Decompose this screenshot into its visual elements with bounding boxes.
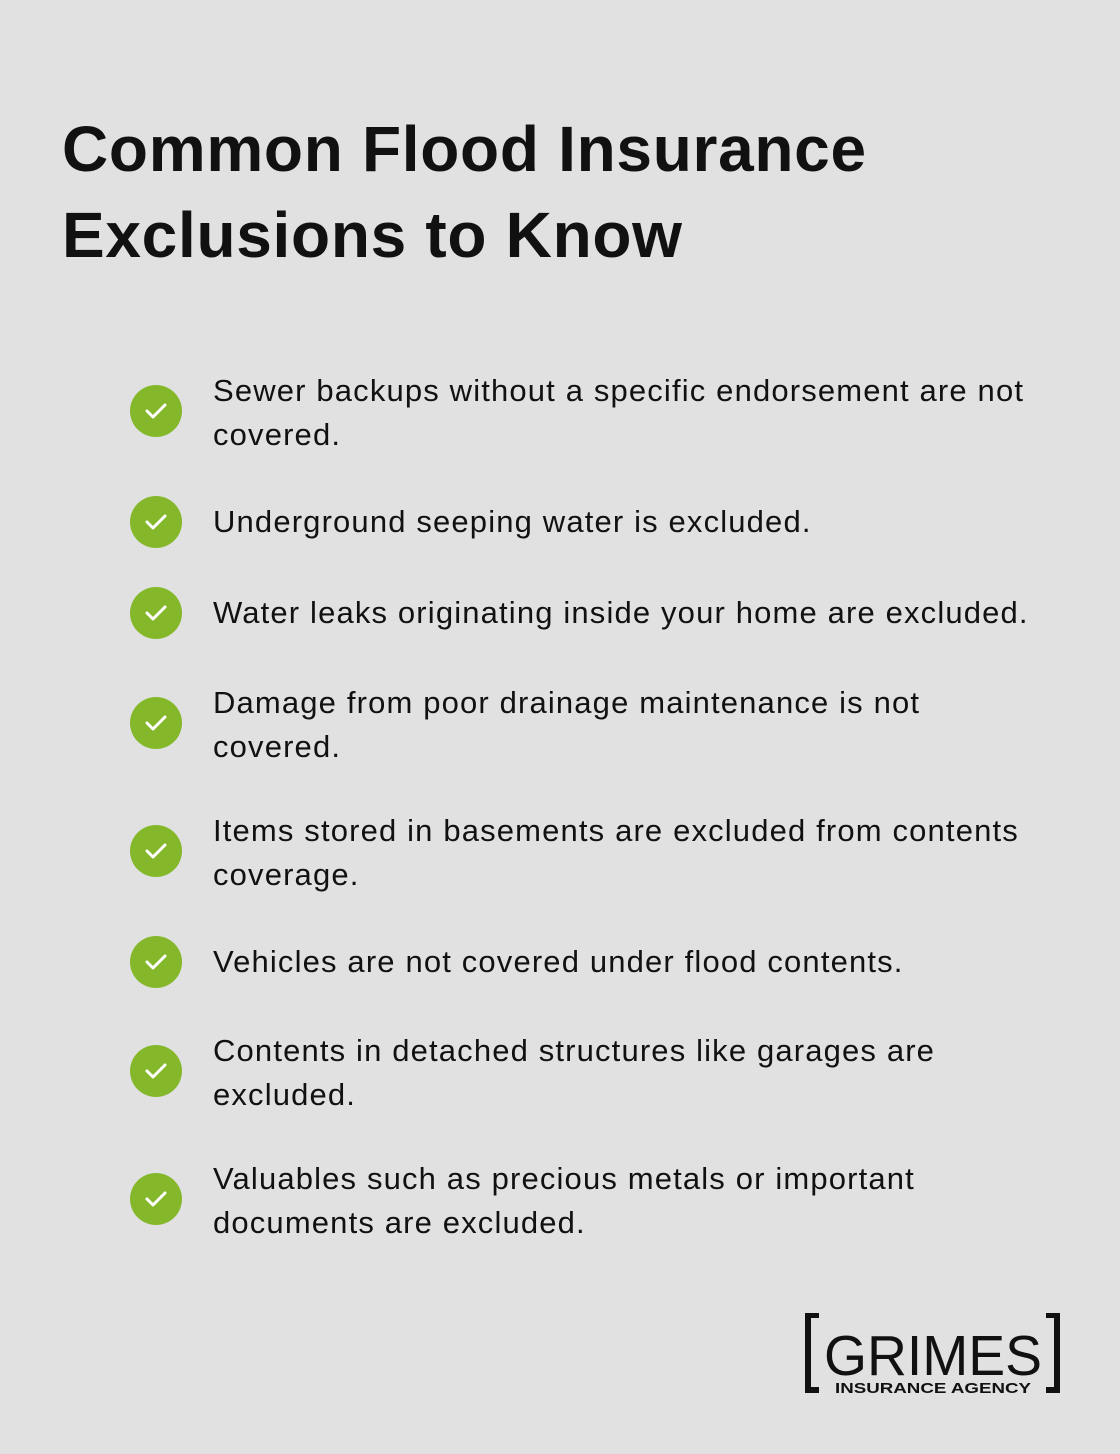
text: Items stored in basements are excluded from contents: [213, 813, 1019, 848]
text: coverage.: [213, 857, 360, 892]
item: valuables: [130, 1161, 915, 1240]
text: [213, 813, 1019, 892]
icon: check: [130, 936, 182, 988]
icon: check: [130, 385, 182, 437]
title: Exclusions to Know: [62, 199, 683, 271]
text: [213, 685, 920, 764]
text: Damage from poor drainage maintenance is not: [213, 685, 920, 720]
icon: check: [130, 825, 182, 877]
item: underground water: [130, 496, 812, 548]
title: Common Flood Insurance: [62, 113, 867, 185]
title: [62, 113, 867, 271]
logo: Grimes Insurance Agency: GRIMES: [824, 1324, 1042, 1388]
icon: check: [130, 1045, 182, 1097]
icon: check: [130, 697, 182, 749]
item: water leaks: [130, 587, 1029, 639]
item: vehicles: [130, 936, 904, 988]
icon: check: [130, 1173, 182, 1225]
text: excluded.: [213, 1077, 356, 1112]
item: sewer backups: [130, 373, 1024, 452]
text: covered.: [213, 729, 341, 764]
text: Vehicles are not covered under flood contents.: [213, 944, 904, 979]
text: Underground seeping water is excluded.: [213, 504, 812, 539]
text: Water leaks originating inside your home are excluded.: [213, 595, 1029, 630]
text: Sewer backups without a specific endorsement are not: [213, 373, 1024, 408]
icon: check: [130, 496, 182, 548]
text: covered.: [213, 417, 341, 452]
icon: check: [130, 587, 182, 639]
text: Contents in detached structures like garages are: [213, 1033, 935, 1068]
text: [213, 373, 1024, 452]
text: Valuables such as precious metals or important: [213, 1161, 915, 1196]
text: [213, 1161, 915, 1240]
item: detached structures: [130, 1033, 935, 1112]
item: drainage: [130, 685, 920, 764]
text: documents are excluded.: [213, 1205, 586, 1240]
item: basements: [130, 813, 1019, 892]
text: [213, 1033, 935, 1112]
